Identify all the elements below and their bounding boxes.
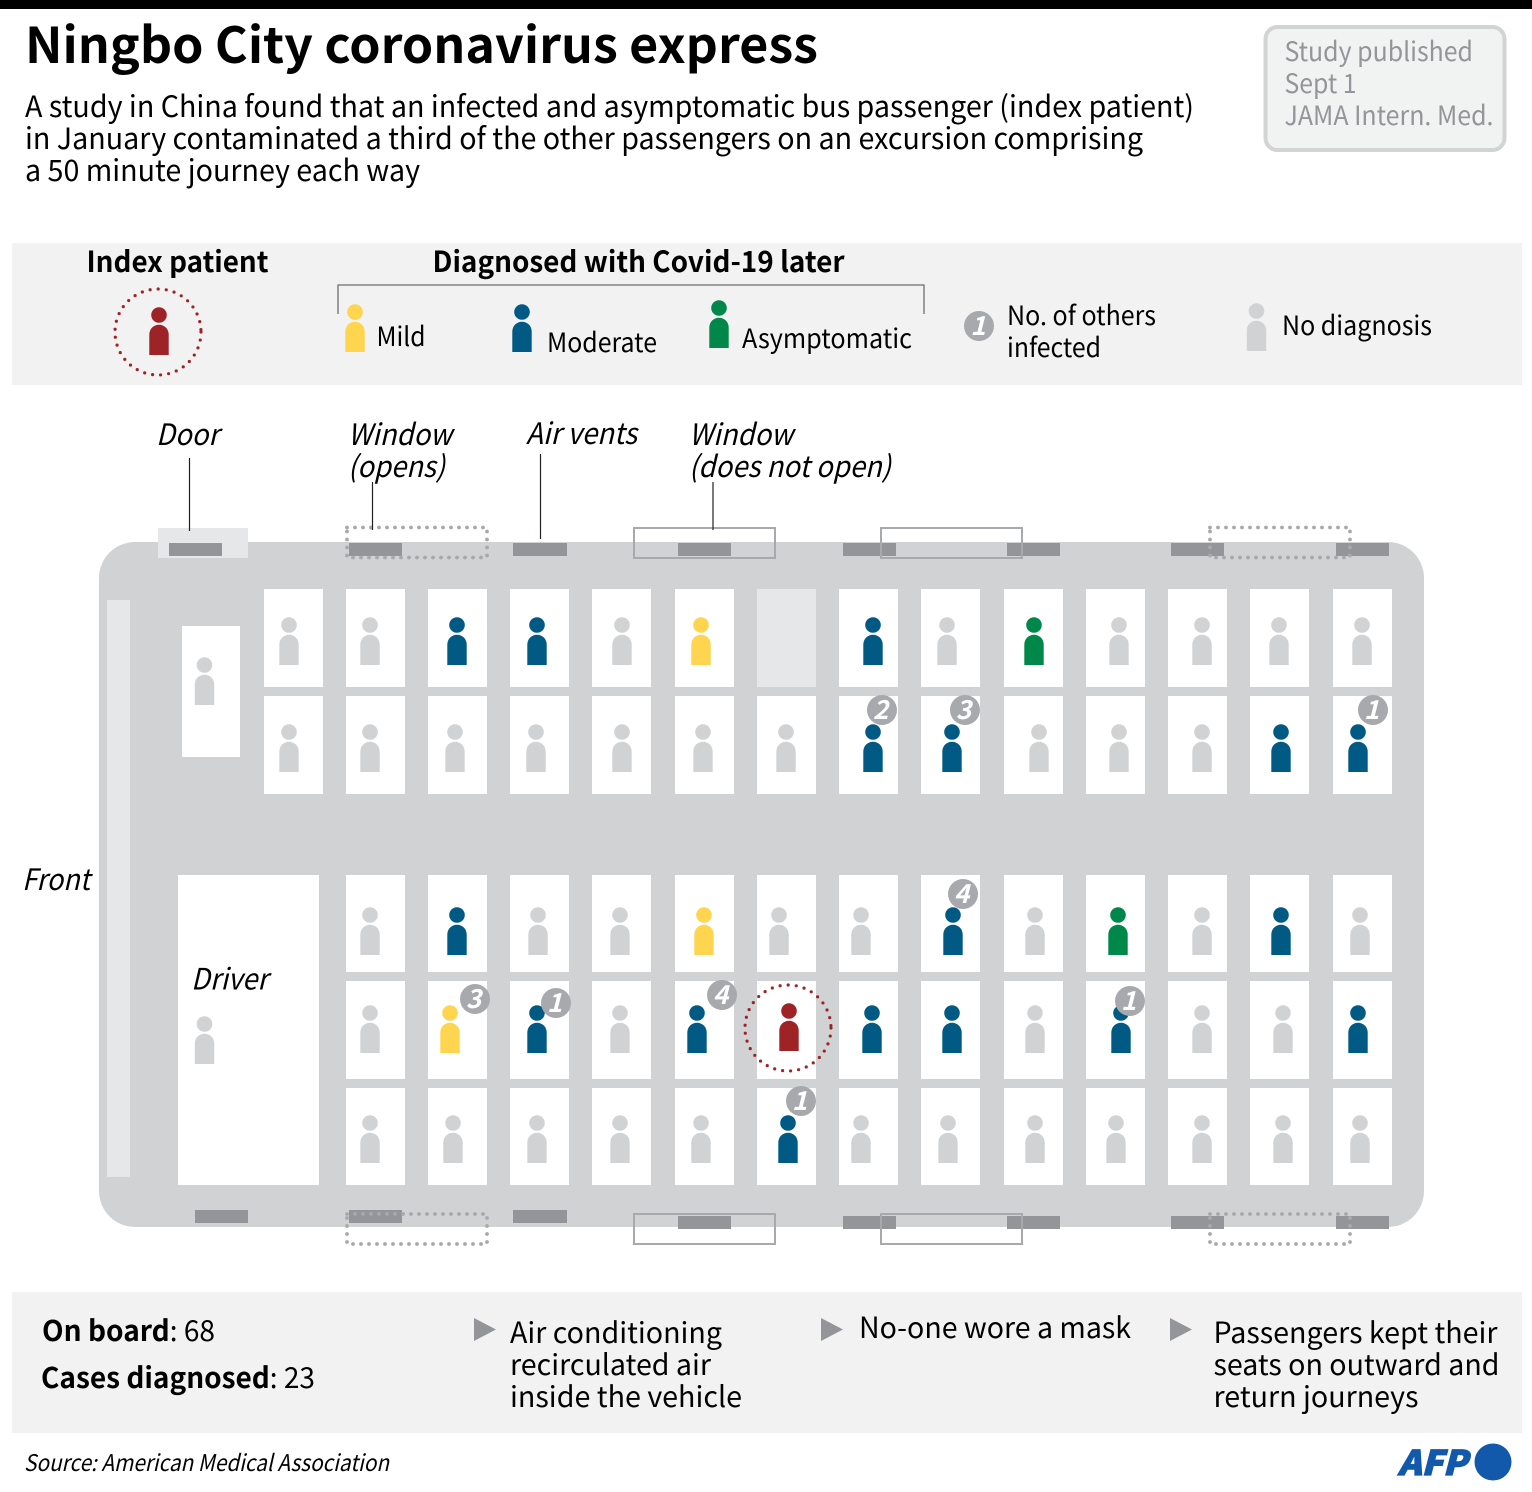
badges: others infected: 3: [956, 690, 974, 727]
badges: others infected: 4: [713, 975, 731, 1012]
legend: no diagnosis: [1247, 303, 1432, 351]
note: air conditioning: [474, 1310, 742, 1416]
passengers: front left seat and driver: [195, 657, 214, 1064]
legend heading: index patient: Index patient: [86, 239, 268, 281]
passengers: row 3: [360, 907, 1370, 955]
note: seats: [1170, 1310, 1500, 1416]
bus diagram: [99, 528, 1424, 1244]
badges: others infected: 1: [547, 983, 562, 1020]
label: door: [156, 412, 223, 531]
legend: number of others infected: No. of others: [1007, 294, 1156, 333]
subtitle text: in January contaminated a third of the other passengers on an excursion comprising: [25, 116, 1143, 158]
air vents, top side: [349, 543, 1389, 556]
passengers: row 5: [360, 1115, 1370, 1163]
legend: no diagnosis: No diagnosis: [1282, 304, 1432, 343]
legend: number of others infected: [964, 294, 1156, 365]
badges: others infected: 2: [873, 690, 891, 727]
panel: legend: [12, 239, 1522, 385]
legend bracket: [338, 285, 924, 314]
legend: number of others infected: infected: [1007, 326, 1101, 365]
label: air vents: [526, 411, 639, 539]
legend: number of others infected: 1: [970, 306, 986, 343]
legend: mild: [345, 304, 426, 354]
badges: others infected: 4: [954, 874, 972, 911]
stat: cases diagnosed: Cases diagnosed: 23: [41, 1356, 315, 1397]
stat: on board: On board: 68: [42, 1309, 215, 1350]
subtitle text: A study in China found that an infected and asymptomatic bus passenger (index patient): [25, 84, 1194, 126]
badges: others infected: [460, 690, 1388, 1118]
windows that open: [347, 528, 1350, 1244]
legend icon: index patient: [115, 289, 201, 375]
source: Source: American Medical Association: [24, 1444, 390, 1478]
passengers: row 4: [360, 1005, 1368, 1053]
badges: others infected: 1: [792, 1081, 807, 1118]
AFP logo: AFP: [1397, 1436, 1472, 1485]
seats: [178, 589, 1392, 1185]
title: Ningbo City coronavirus express: [25, 7, 818, 78]
AFP logo: [1397, 1436, 1512, 1485]
bus body: [99, 542, 1424, 1227]
passengers: row 1: [279, 617, 1372, 665]
subtitle text: [25, 84, 1194, 190]
label: window does not open: (does not open): [689, 444, 892, 486]
badges: others infected: 1: [1121, 981, 1136, 1018]
note: seats: Passengers kept their: [1214, 1310, 1498, 1352]
note: seats: seats on outward and: [1214, 1342, 1500, 1384]
note: seats: return journeys: [1214, 1374, 1418, 1416]
subtitle text: a 50 minute journey each way: [25, 148, 420, 190]
study published box: JAMA Intern. Med.: [1284, 94, 1494, 133]
label: window opens: [348, 412, 455, 530]
note: air conditioning: inside the vehicle: [510, 1374, 742, 1416]
panel: facts: [12, 1292, 1522, 1433]
note: air conditioning: recirculated air: [510, 1342, 712, 1384]
legend heading: diagnosed: Diagnosed with Covid-19 later: [432, 239, 845, 281]
legend: mild: Mild: [376, 315, 426, 354]
study published box: Study published: [1284, 30, 1473, 69]
passengers: row 2: [279, 724, 1368, 772]
label: door: Door: [156, 412, 223, 454]
label: front: Front: [22, 857, 94, 899]
legend: moderate: [512, 304, 657, 360]
label: window does not open: [689, 412, 892, 530]
windows that do not open: [634, 528, 1022, 1244]
badges: others infected: 3: [466, 979, 484, 1016]
study published box: [1266, 27, 1504, 150]
label: window opens: Window: [348, 412, 455, 454]
label: driver: Driver: [191, 956, 272, 998]
note: masks: No-one wore a mask: [859, 1305, 1131, 1347]
air vents, bottom side: [195, 1210, 1389, 1229]
label: window does not open: Window: [689, 412, 796, 454]
legend: asymptomatic: Asymptomatic: [742, 317, 912, 356]
badges: others infected: 1: [1364, 690, 1379, 727]
study published box: Sept 1: [1284, 62, 1356, 101]
door: [158, 528, 248, 558]
note: air conditioning: Air conditioning: [510, 1310, 722, 1352]
label: air vents: Air vents: [526, 411, 639, 453]
index patient on the bus: [745, 985, 831, 1071]
legend: asymptomatic: [709, 300, 912, 356]
legend: moderate: Moderate: [547, 321, 657, 360]
label: window opens: (opens): [348, 444, 446, 486]
